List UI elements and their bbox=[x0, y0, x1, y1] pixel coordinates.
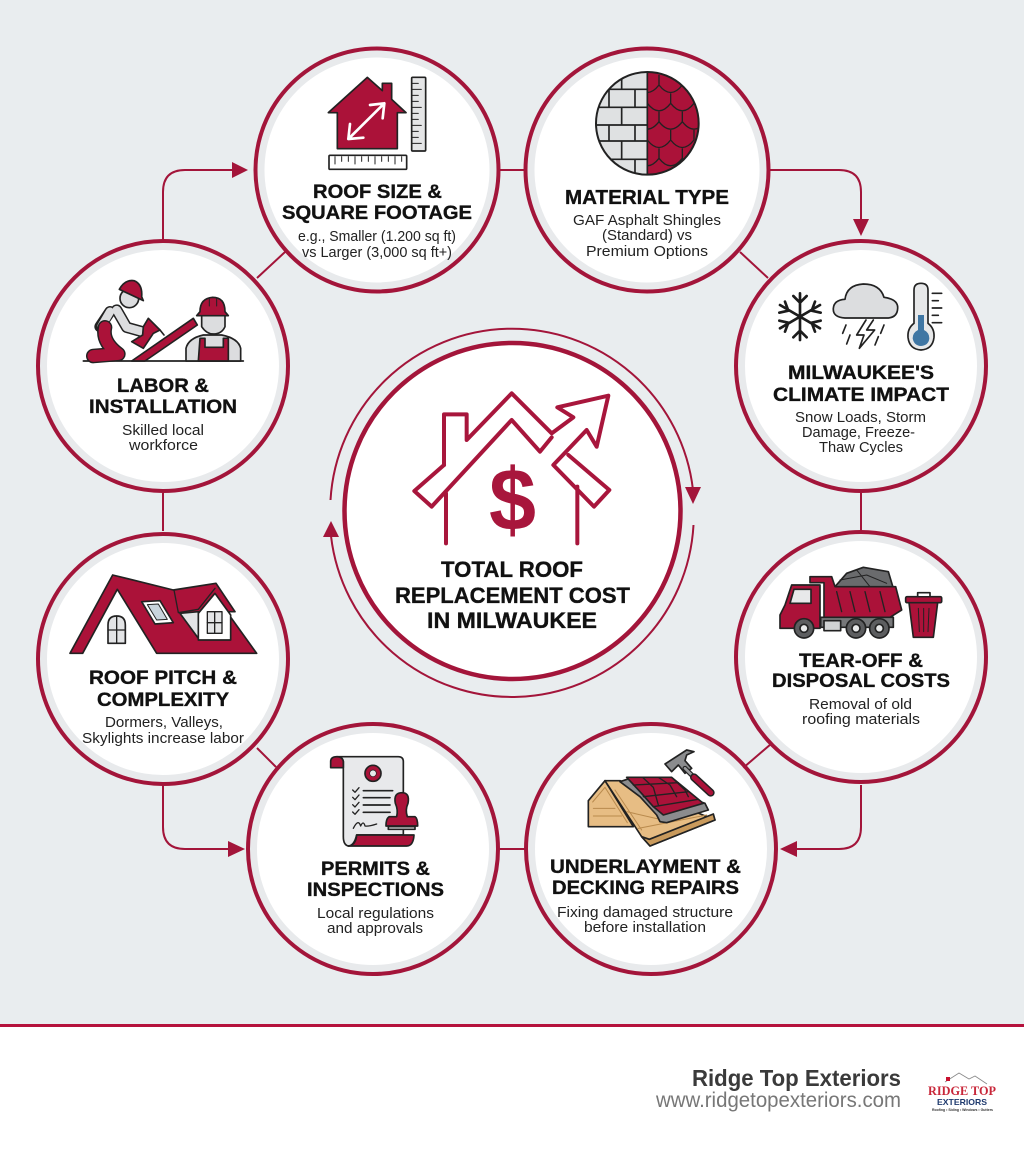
text: roof size description: e.g., Smaller (1.200 sq ft) bbox=[298, 229, 456, 245]
footer: Ridge Top Exteriors logo: RIDGE TOP bbox=[928, 1083, 996, 1098]
text: roof size description bbox=[298, 229, 456, 261]
text: climate description: Damage, Freeze- bbox=[802, 425, 915, 441]
icon: roof deck, shingles and hammer bbox=[588, 750, 715, 846]
text: climate description: Thaw Cycles bbox=[819, 440, 903, 456]
text: permits description: Local regulations bbox=[317, 906, 434, 922]
heading: labor bbox=[89, 375, 237, 418]
text: material description: Premium Options bbox=[586, 244, 708, 260]
panel: material type bbox=[526, 48, 768, 292]
footer: company name and URL bbox=[655, 1065, 901, 1112]
footer: Ridge Top Exteriors logo bbox=[928, 1073, 996, 1112]
footer: company name and URL: Ridge Top Exteriors bbox=[692, 1065, 901, 1091]
text: labor description: workforce bbox=[128, 438, 198, 454]
text: tear-off description: Removal of old bbox=[809, 697, 912, 713]
heading: roof pitch: COMPLEXITY bbox=[97, 689, 229, 711]
heading: underlayment: UNDERLAYMENT & bbox=[550, 856, 741, 878]
icon: roof with dormer and skylight bbox=[70, 575, 257, 653]
heading: total roof replacement cost: TOTAL ROOF bbox=[441, 557, 583, 582]
icon: dump truck and trash can bbox=[780, 567, 942, 638]
text: material description bbox=[573, 213, 721, 260]
panel: total roof replacement cost bbox=[344, 343, 680, 679]
heading: climate: CLIMATE IMPACT bbox=[773, 384, 949, 406]
heading: total roof replacement cost: IN MILWAUKEE bbox=[427, 608, 597, 633]
text: material description: (Standard) vs bbox=[602, 228, 692, 244]
icon: permit document and stamp bbox=[331, 757, 418, 846]
heading: roof pitch: ROOF PITCH & bbox=[89, 667, 237, 689]
text: underlayment description: Fixing damaged structure bbox=[557, 905, 733, 921]
heading: permits: PERMITS & bbox=[321, 858, 430, 880]
text: permits description bbox=[317, 906, 434, 937]
text: material description: GAF Asphalt Shingles bbox=[573, 213, 721, 229]
text: underlayment description: before installation bbox=[584, 920, 706, 936]
text: tear-off description: roofing materials bbox=[802, 712, 920, 728]
heading: permits bbox=[307, 858, 444, 901]
heading: total roof replacement cost: REPLACEMENT COST bbox=[395, 583, 630, 608]
heading: roof size bbox=[282, 181, 472, 224]
icon: house with rising arrow and dollar bbox=[414, 393, 609, 543]
heading: total roof replacement cost bbox=[395, 557, 630, 633]
heading: roof pitch bbox=[89, 667, 237, 711]
panel: permits and inspections bbox=[248, 724, 498, 974]
panel: roof size and square footage bbox=[256, 48, 498, 292]
heading: underlayment: DECKING REPAIRS bbox=[552, 877, 739, 899]
footer: Ridge Top Exteriors logo: EXTERIORS bbox=[937, 1097, 987, 1107]
panel: underlayment and decking repairs bbox=[526, 724, 776, 974]
footer: company name and URL: www.ridgetopexteriors.com bbox=[655, 1089, 901, 1112]
icon: brick and shingle circle bbox=[593, 70, 706, 177]
icon: two roofing workers bbox=[83, 281, 243, 361]
text: roof pitch description: Dormers, Valleys, bbox=[105, 715, 223, 731]
panel: labor and installation bbox=[38, 241, 288, 491]
icon: dollar sign: $ bbox=[489, 450, 536, 549]
text: roof pitch description: Skylights increase labor bbox=[82, 731, 244, 747]
connector lines and flow arrows bbox=[163, 162, 869, 857]
text: permits description: and approvals bbox=[327, 921, 423, 937]
heading: climate: MILWAUKEE'S bbox=[788, 362, 934, 384]
heading: roof size: SQUARE FOOTAGE bbox=[282, 202, 472, 224]
panel: tear-off and disposal costs bbox=[736, 532, 986, 782]
text: roof pitch description bbox=[82, 715, 244, 747]
text: underlayment description bbox=[557, 905, 733, 936]
panel: milwaukee's climate impact bbox=[736, 241, 986, 491]
text: climate description: Snow Loads, Storm bbox=[795, 410, 926, 426]
heading: material type: MATERIAL TYPE bbox=[565, 186, 729, 209]
text: labor description: Skilled local bbox=[122, 423, 204, 439]
text: roof size description: vs Larger (3,000 sq ft+) bbox=[302, 245, 452, 261]
heading: underlayment bbox=[550, 856, 741, 899]
heading: labor: LABOR & bbox=[117, 375, 209, 397]
text: tear-off description bbox=[802, 697, 920, 728]
heading: climate bbox=[773, 362, 949, 406]
icon: snowflake, storm cloud, thermometer bbox=[779, 283, 942, 350]
footer: Ridge Top Exteriors logo: Roofing • Siding • Windows • Gutters bbox=[932, 1108, 993, 1112]
heading: tear-off bbox=[772, 650, 950, 692]
heading: tear-off: TEAR-OFF & bbox=[799, 650, 923, 672]
text: climate description bbox=[795, 410, 926, 456]
heading: labor: INSTALLATION bbox=[89, 396, 237, 418]
text: labor description bbox=[122, 423, 204, 454]
heading: tear-off: DISPOSAL COSTS bbox=[772, 670, 950, 692]
icon: house with rulers bbox=[328, 77, 426, 169]
heading: permits: INSPECTIONS bbox=[307, 879, 444, 901]
heading: roof size: ROOF SIZE & bbox=[313, 181, 442, 203]
panel: roof pitch and complexity bbox=[38, 534, 288, 784]
circular arrows around centre bbox=[323, 329, 701, 697]
